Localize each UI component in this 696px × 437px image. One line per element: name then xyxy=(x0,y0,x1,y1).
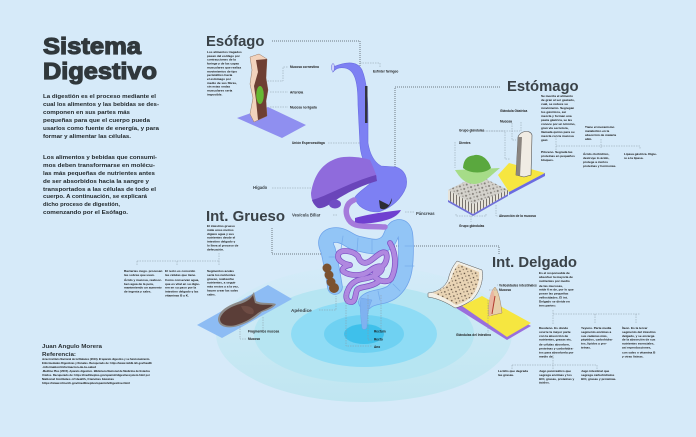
esophagus description: sin estas ondas xyxy=(207,85,230,89)
large intestine text columns: sales. xyxy=(207,292,216,296)
small intestine text columns: de la absorción de sus xyxy=(622,338,656,342)
large intestine text columns: hacen crear las sales xyxy=(207,288,238,292)
esophagus description: el estómago por xyxy=(207,77,232,81)
heading: Int. Delgado: Int. Delgado xyxy=(492,255,577,271)
organ labels: Páncreas xyxy=(416,211,435,216)
intro text block: comenzando por el Esófago. xyxy=(43,210,128,216)
large intestine labels xyxy=(240,317,263,339)
appendix and anal labels: Rectum xyxy=(374,330,386,334)
author and references: Unidos. Recuperado de: https://medlineplus.gov/spanish/digestivesystem.html por xyxy=(42,373,150,377)
esophagus description: musculares que realiza xyxy=(207,65,241,69)
stomach description: mezcla con la mucosa xyxy=(541,134,574,138)
esophagus description: pasan del esófago por xyxy=(207,54,241,58)
author and references: Jerez-Instituto Nacional de la Diabetes (2013). El aparato digestivo y su funcionamiento. xyxy=(42,357,150,361)
large intestine text columns: que es vital en su digie- xyxy=(165,282,200,286)
small intestine text columns: segmento enzimas a xyxy=(581,330,612,334)
small intestine section: Vellosidades intestinales xyxy=(499,284,537,288)
liver xyxy=(311,157,377,208)
stomach text columns: protege a ciertos xyxy=(583,160,608,164)
organ labels: Apéndice xyxy=(291,308,312,313)
stomach description: Se mezcla el alimento xyxy=(541,94,573,98)
small intestine branch lines xyxy=(512,310,640,369)
small intestine text columns: ocurre la mayor parte xyxy=(539,330,571,334)
large intestine text columns: de ingesta y sales. xyxy=(124,290,151,294)
stomach text columns: re a la lipasa. xyxy=(624,156,644,160)
small intestine description: vellosidades. El int. xyxy=(539,296,568,300)
small intestine text columns: HCl, grasas, proteínas y xyxy=(539,377,575,381)
heading: Int. Grueso: Int. Grueso xyxy=(206,209,285,225)
intro text block: Los alimentos y bebidas que consumi- xyxy=(43,155,157,161)
esophagus labels: Unión Esperoesófaga xyxy=(292,141,325,145)
small intestine description: mide 6 m de, por lo que xyxy=(539,288,574,292)
heading: Esofago: Esófago xyxy=(206,34,264,50)
intro text block: formar y alimentar las células. xyxy=(43,134,131,140)
small intestine text columns: segmento del intestino xyxy=(622,330,656,334)
author and references: Enfermedades Digestivas y Renales. Recuperado de: https://www.niddk.nih.gov/health xyxy=(42,361,152,365)
small intestine text columns: de células absorben, xyxy=(539,343,570,347)
large intestine text columns: vitaminas B y K. xyxy=(165,294,189,298)
small intestine text columns: Jugo intestinal que xyxy=(581,369,609,373)
stomach branch lines xyxy=(556,136,640,150)
large intestine text columns: nutrientes, a seguir xyxy=(207,281,236,285)
small intestine section: Glándulas del Intestino xyxy=(456,333,491,337)
small intestine text columns: tos para absorberla por xyxy=(539,350,574,354)
stomach text columns: alim. xyxy=(585,137,592,141)
small intestine text columns: medio de. xyxy=(539,354,554,358)
small intestine text columns: tos, lípidos y pro- xyxy=(581,342,607,346)
small intestine text columns: proteínas y carbohidra- xyxy=(539,347,573,351)
large intestine description: digiere agua y sus xyxy=(207,232,234,236)
small intestine text columns: péptidos, carbohidra- xyxy=(581,338,613,342)
intro text block: cual los alimentos y las bebidas se des- xyxy=(43,102,159,108)
esophagus tissue illustration xyxy=(237,54,306,138)
small intestine description: nutrientes por medio xyxy=(539,279,570,283)
intro text block: mos deben transformarse en molécu- xyxy=(43,163,155,169)
organ labels xyxy=(253,185,435,313)
large intestine tissue illustration xyxy=(197,285,292,338)
author and references: Referencia: xyxy=(42,352,76,358)
small intestine description: posee las pequeñas xyxy=(539,292,569,296)
esophagus labels: Mucosa no ligada xyxy=(290,106,317,110)
small intestine description: absorber la mayoría de xyxy=(539,275,573,279)
heading: Estomago: Estómago xyxy=(507,79,579,95)
small intestine text columns: Duodeno. Es donde xyxy=(539,326,568,330)
small intestine tissue illustration xyxy=(428,261,531,340)
appendix and anal labels xyxy=(319,295,386,349)
small intestine text columns: delgado, y se encarga xyxy=(622,334,655,338)
dotted connector lines xyxy=(265,41,500,254)
stomach description: gran vía secretora, xyxy=(541,126,569,130)
stomach text columns: Lipasa gástrica. Digie- xyxy=(624,152,657,156)
large intestine text columns: manteniendo un aumento xyxy=(124,286,162,290)
intro text block: las más pequeñas de nutrientes antes xyxy=(43,171,155,177)
intro text block: cuerpo. A continuación, se explicará xyxy=(43,194,148,200)
small intestine text columns: nutrientes esenciales, xyxy=(622,342,654,346)
esophagus description: Los alimentos tragados xyxy=(207,50,242,54)
small intestine text columns: Íleon. Es la tercer xyxy=(622,325,648,330)
stomach text columns: absorción de materia xyxy=(585,133,616,137)
large intestine text columns: Bacterias ciego. procesan xyxy=(124,269,162,273)
small intestine description: tres partes: xyxy=(539,303,556,307)
large intestine text columns: grueso, reabsorbe xyxy=(207,277,234,281)
large intestine branch lines xyxy=(137,253,219,266)
intro text block: transportados a las células de todo el xyxy=(43,187,156,193)
large intestine text columns: más restos y a la vez, xyxy=(207,285,239,289)
small intestine labels xyxy=(488,285,498,333)
small intestine text columns: así reproducciones, xyxy=(622,346,651,350)
intro text block xyxy=(43,94,160,216)
main title xyxy=(43,33,157,84)
pancreas xyxy=(355,210,401,224)
stomach description: movimiento. Segregan xyxy=(541,106,574,110)
stomach text columns: proteínas y hormonas. xyxy=(583,164,616,168)
esophagus description: contracciones de la xyxy=(207,58,236,62)
gallbladder xyxy=(329,200,341,208)
stomach description: cual, se reduce su xyxy=(541,102,568,106)
esophagus section xyxy=(206,34,398,145)
appendix and anal labels: Recto xyxy=(374,338,383,342)
main title: Sistema xyxy=(43,33,142,59)
large intestine text columns: intestino delgado y las xyxy=(165,290,199,294)
esophagus description: movimientos de tipo xyxy=(207,69,237,73)
stomach section: Glándula Gástrica xyxy=(500,109,528,113)
small intestine xyxy=(338,243,395,302)
small intestine text columns: con sales o vitamina B xyxy=(622,350,656,354)
stomach description: los gástricos, así xyxy=(541,110,566,114)
esophagus labels: Arteriola xyxy=(290,90,303,94)
stomach section: Dientes xyxy=(459,141,471,145)
esophagus description: faringe y de las capas xyxy=(207,62,239,66)
small intestine text columns: Yeyuno. Parte media xyxy=(581,326,612,330)
stomach description: de gran al ser gastado, xyxy=(541,98,575,102)
stomach labels xyxy=(455,122,521,222)
author and references: -information/informacion-de-la-salud xyxy=(42,365,96,369)
small intestine text columns: Jugo pancreático que xyxy=(539,369,571,373)
small intestine text columns: las grasas. xyxy=(498,373,514,377)
stomach section: Grupo glándulas xyxy=(459,224,485,228)
small intestine text columns: con la absorción de xyxy=(539,334,568,338)
stomach tissue illustration xyxy=(448,131,545,216)
small intestine text columns: segrega enzimas y los xyxy=(539,373,572,377)
stomach description: llamada quimo para su xyxy=(541,130,575,134)
large intestine text columns: sería los nutrientes xyxy=(207,273,236,277)
author and references: Juan Angulo Morera xyxy=(42,344,103,350)
stomach text columns: metabólico en la xyxy=(585,129,610,133)
author and references: National Institutes of Health, Ciencias básicas xyxy=(42,377,115,381)
esophagus description: musculares sería xyxy=(207,88,233,92)
stomach text columns: proteínas en pequeños xyxy=(541,154,575,158)
small intestine text columns: teínas. xyxy=(581,346,591,350)
small intestine text columns: sus cadenas más, xyxy=(581,334,608,338)
large intestine text columns: Ácido y mucosa, reabsor- xyxy=(124,277,162,282)
small intestine text columns: HCl, grasas y proteínas. xyxy=(581,377,616,381)
small intestine text columns: La bilis que degrada xyxy=(498,369,528,373)
intro text block: La digestión es el proceso mediante el xyxy=(43,94,156,100)
large intestine description: intestino delgado y xyxy=(207,240,235,244)
stomach description: mezcla y forman una xyxy=(541,114,572,118)
fecal matter xyxy=(322,264,339,293)
intro text block: usarlos como fuente de energía, y para xyxy=(43,126,160,132)
stomach section: Mucosa xyxy=(500,120,512,124)
stomach text columns: Tiene el mecanismo xyxy=(585,125,614,129)
large intestine description: defecación. xyxy=(207,247,224,251)
stomach text columns: Ácido clorhídrico, xyxy=(583,151,609,156)
stomach text columns: Piloreno. Segrada las xyxy=(541,150,573,154)
large intestine section: Fragmentos mucosa xyxy=(248,330,279,334)
esophagus labels: Mucosa cornestina xyxy=(290,65,319,69)
large intestine description: mide unos metros xyxy=(207,228,234,232)
large intestine text columns: las sobras que usan. xyxy=(124,273,155,277)
large intestine section: Mucosa xyxy=(248,337,260,341)
small intestine text columns: ácidos. xyxy=(539,381,550,385)
author and references xyxy=(42,344,152,385)
esophagus description: peristáltico hacia xyxy=(207,73,233,77)
organ labels: Vesícula Biliar xyxy=(292,212,321,218)
esophagus description: imposible. xyxy=(207,92,222,96)
intro text block: componen en sus partes más xyxy=(43,110,130,116)
author and references: https://www.nlm.nih.gov/medlineplus/spanish/digestive.html xyxy=(42,381,130,385)
small intestine description: Es el responsable de xyxy=(539,271,570,275)
stomach description: pasta gástrica, se les xyxy=(541,118,572,122)
small intestine text columns: segrega carbohidratos xyxy=(581,373,615,377)
esophagus tube and stomach xyxy=(332,63,407,212)
organ labels: Hígado xyxy=(253,185,268,190)
author and references: -Medline Plus (2015). Aparato digestivo. Biblioteca Nacional de Medicina de Estados xyxy=(42,369,151,373)
small intestine text columns: nutrientes, grasas etc. xyxy=(539,338,572,342)
intro text block: pequeñas para que el cuerpo pueda xyxy=(43,118,151,124)
small intestine description: de las mucosas, xyxy=(539,284,563,288)
large intestine text columns: Segmentos azules xyxy=(207,269,234,273)
large intestine text columns: ren en su paso por la xyxy=(165,286,196,290)
stomach section xyxy=(448,79,657,228)
stomach description: conoce por un término, xyxy=(541,122,576,126)
esophagus description: medio de sus fibras, xyxy=(207,81,237,85)
small intestine section: Mucosa xyxy=(499,288,511,292)
large intestine text columns: ben agua de la pera, xyxy=(124,282,154,286)
large intestine text columns: las células que tiene. xyxy=(165,273,196,277)
appendix and anal labels: Ano xyxy=(374,345,380,349)
main title: Digestivo xyxy=(43,58,157,84)
stomach section: Absorción de la mucosa xyxy=(499,214,536,218)
large intestine description: lo lleva al proceso de xyxy=(207,244,239,248)
stomach text columns: bloques. xyxy=(541,158,554,162)
small intestine description: Delgado se divide en xyxy=(539,299,570,303)
esophagus labels: Esfínter faríngeo xyxy=(373,70,398,74)
concentric target ellipses xyxy=(216,266,512,402)
large intestine text columns: El recto es conocido xyxy=(165,269,195,273)
duodenum xyxy=(346,200,385,227)
small intestine section xyxy=(428,255,656,385)
stomach description: gast. xyxy=(541,138,548,142)
large intestine xyxy=(326,227,414,329)
small intestine text columns: y otras lisinas. xyxy=(622,354,644,358)
stomach section: Grupo glándulas xyxy=(459,128,485,132)
stomach text columns: destruye lo ácido, xyxy=(583,156,609,160)
esophagus labels xyxy=(290,65,398,145)
intro text block: de ser absorbidos hacia la sangre y xyxy=(43,179,150,185)
large intestine description: nutrientes desde el xyxy=(207,236,235,240)
large intestine section xyxy=(124,209,292,341)
intro text block: dicho proceso de digestión, xyxy=(43,202,120,208)
large intestine text columns: Como conservan agua, xyxy=(165,278,199,282)
large intestine description: El intestino grueso xyxy=(207,224,235,228)
